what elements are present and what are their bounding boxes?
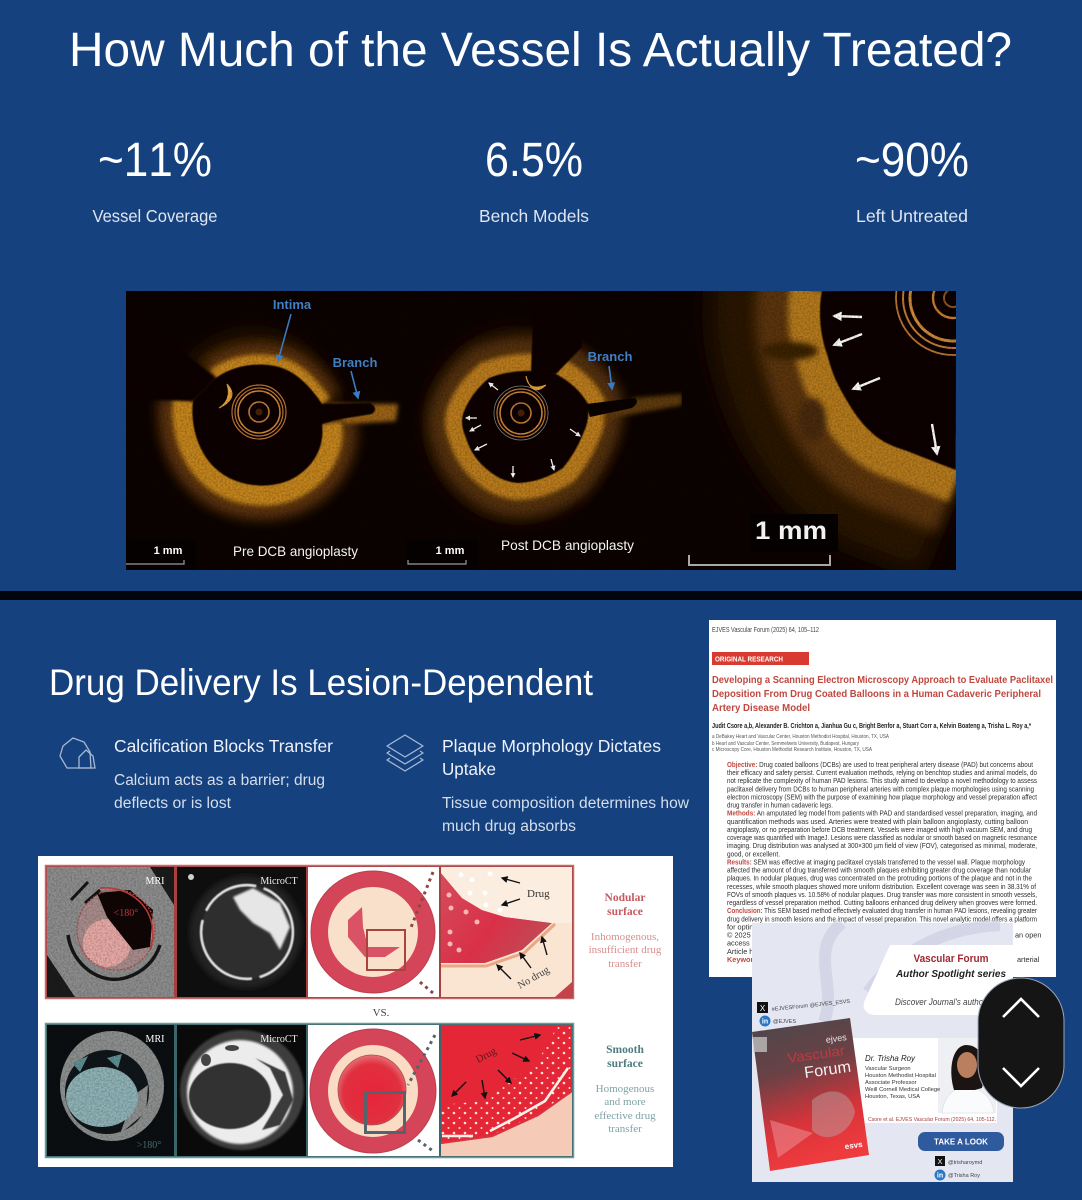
- stat: vessel coverage: Vessel Coverage: [92, 206, 218, 226]
- affiliations: c Microscopy Core, Houston Methodist Research Institute, Houston, TX, USA: [712, 747, 872, 753]
- affiliations: a DeBakey Heart and Vascular Center, Houston Methodist Hospital, Houston, TX, USA: [712, 734, 889, 740]
- doctor card: Csore et al. EJVES Vascular Forum (2025) 64, 105-112.: [868, 1117, 996, 1123]
- MicroCT nodular: MicroCT: [260, 876, 298, 887]
- abstract: Keywords: [727, 955, 762, 964]
- stat: left untreated: [855, 134, 969, 226]
- abstract: drug delivery in smooth lesions and the impact of vessel preparation. This novel analytic model offers a platform: [727, 914, 1037, 924]
- divider band: [0, 591, 1082, 600]
- abstract: for optimising: [727, 922, 770, 932]
- magnified nodular: No drug: [516, 964, 552, 992]
- stat: vessel coverage: ~11%: [98, 134, 212, 187]
- social handles bottom: X: [937, 1157, 943, 1166]
- text: nodular: Nodular: [605, 892, 645, 904]
- abstract: arterial: [1017, 955, 1040, 964]
- social handles bottom: @trisharoymd: [948, 1160, 982, 1166]
- illustration nodular: [308, 867, 439, 997]
- magnified smooth: [441, 1025, 572, 1156]
- abstract: [727, 760, 1041, 964]
- text: nodular: [589, 892, 662, 970]
- heading: drug delivery: Drug Delivery Is Lesion-Dependent: [49, 662, 594, 703]
- abstract: good, or excellent.: [727, 850, 780, 858]
- large white arrows: [834, 316, 937, 454]
- MicroCT smooth: [177, 1025, 306, 1156]
- icon: chevron down: [1003, 1068, 1039, 1086]
- abstract: not replicate the complexity of human PAD lesions. This study aimed to develop a novel methodology to assess: [727, 776, 1037, 785]
- doctor card: Houston, Texas, USA: [865, 1094, 920, 1100]
- tag: original research: [712, 652, 809, 665]
- abstract: drug transfer in human cadaveric legs.: [727, 800, 833, 810]
- abstract: Objective: Drug coated balloons (DCBs) are used to treat peripheral artery disease (PAD) but concerns about: [727, 760, 1033, 769]
- doctor card: Houston Methodist Hospital: [865, 1073, 936, 1079]
- social handles bottom: @Trisha Roy: [948, 1173, 980, 1179]
- spotlight tab: Discover Journal's authors: [895, 997, 990, 1008]
- doctor card: [853, 1038, 997, 1123]
- label: Intima: Intima: [273, 297, 312, 312]
- abstract: electron microscopy (SEM) with the purpose of examining how plaque morphology and vessel preparation affect: [727, 792, 1037, 802]
- abstract: their efficacy and safety persist. Current evaluation methods, relying on benchtop studies and animal models, do: [727, 768, 1037, 777]
- journal cover: Forum: [803, 1059, 852, 1082]
- panel: nodular vs smooth figure: [38, 856, 673, 1167]
- scale bar: pre: 1 mm: [154, 545, 183, 557]
- block: plaque morphology: Plaque Morphology Dictates: [442, 736, 661, 756]
- doctor card: Vascular Surgeon: [865, 1066, 911, 1072]
- button: take a look: [918, 1132, 1004, 1151]
- scale bar: post: 1 mm: [436, 545, 465, 557]
- social handles top: #EJVESForum @EJVES_ESVS: [772, 999, 851, 1013]
- text: smooth: transfer: [608, 1123, 642, 1135]
- scale bar: pre: [126, 546, 185, 565]
- stat: bench models: 6.5%: [485, 134, 583, 187]
- MRI nodular: MRI: [146, 876, 164, 887]
- label: Branch post: Branch: [588, 349, 632, 364]
- stat: bench models: [479, 134, 589, 226]
- stat: bench models: Bench Models: [479, 206, 589, 226]
- doctor card: Weill Cornell Medical College: [865, 1087, 940, 1093]
- illustration smooth: [308, 1025, 439, 1156]
- label: versus: VS.: [373, 1007, 390, 1019]
- icon: chevron up: [1003, 999, 1039, 1017]
- scroll control pill: [978, 978, 1064, 1108]
- stat: vessel coverage: [92, 134, 218, 226]
- spotlight tab: Author Spotlight series: [895, 968, 1006, 980]
- panel: journal article: [709, 620, 1056, 977]
- abstract: affected the amount of drug transferred with smooth plaques exhibiting greater drug coverage than nodular: [727, 866, 1031, 874]
- abstract: recesses, while smooth plaques showed more uniform distribution. Excellent coverage was seen in 38.31% of: [727, 882, 1037, 891]
- spotlight tab: [864, 945, 1013, 1015]
- label: Intima: [273, 297, 312, 361]
- abstract: regardless of vessel preparation method. Cutting balloons enhanced drug delivery when grooves were formed.: [727, 898, 1037, 907]
- text: nodular: insufficient drug: [589, 944, 662, 956]
- text: smooth: and more: [604, 1096, 646, 1108]
- panel: OCT images: [126, 291, 956, 570]
- scale bar: post: [407, 546, 467, 565]
- MRI smooth: [47, 1025, 174, 1156]
- button: take a look: TAKE A LOOK: [934, 1138, 988, 1146]
- text: nodular: surface: [607, 906, 643, 918]
- block: calcification: deflects or is lost: [114, 795, 232, 812]
- abstract: an open: [1015, 930, 1041, 940]
- journal cover: [752, 1018, 869, 1171]
- affiliations: [712, 734, 889, 753]
- text: nodular: Inhomogenous,: [591, 931, 659, 943]
- doctor card: Associate Professor: [865, 1080, 917, 1086]
- abstract: imaging. Drug distribution was analysed at 300×300 µm field of view (FOV), categorised as minimal, moderate,: [727, 841, 1037, 850]
- MicroCT smooth: MicroCT: [260, 1034, 298, 1045]
- MRI nodular: [47, 867, 174, 997]
- stats row: [92, 134, 969, 226]
- label: Branch pre: [333, 355, 377, 398]
- MicroCT nodular: [177, 867, 306, 997]
- journal citation: EJVES Vascular Forum (2025) 64, 105–112: [712, 625, 819, 634]
- abstract: angioplasty, or no preparation before DCB treatment. Vessels were imaged with high vacuum SEM, and drug: [727, 825, 1032, 834]
- label: Branch post: [588, 349, 632, 389]
- abstract: Article history: [727, 947, 771, 956]
- tag: original research: ORIGINAL RESEARCH: [715, 654, 783, 664]
- scale bar: magnified: 1 mm: [755, 517, 827, 545]
- small white arrows: [466, 383, 580, 477]
- magnified nodular: [441, 867, 572, 997]
- stat: left untreated: ~90%: [855, 134, 969, 187]
- social handles bottom: in: [937, 1172, 943, 1180]
- journal cover: esvs: [844, 1140, 864, 1151]
- label: Branch pre: Branch: [333, 355, 377, 370]
- social handles top: @EJVES: [773, 1019, 796, 1025]
- MRI smooth: MRI: [146, 1034, 164, 1045]
- abstract: © 2025 The Authors: [727, 930, 792, 940]
- journal cover: Vascular: [786, 1042, 846, 1066]
- social handles top: [757, 999, 851, 1026]
- row: smooth surface: [46, 1024, 574, 1158]
- text: smooth: Smooth: [606, 1044, 644, 1056]
- film grain: [156, 291, 956, 548]
- magnified nodular: Drug: [527, 888, 550, 900]
- text: smooth: surface: [607, 1058, 643, 1070]
- article title: Deposition From Drug Coated Balloons in a Human Cadaveric Peripheral: [712, 688, 1041, 700]
- OCT image: magnified wall: [762, 241, 1010, 472]
- text: smooth: effective drug: [594, 1110, 656, 1122]
- icon: calcification: [60, 738, 95, 768]
- block: plaque morphology: much drug absorbs: [442, 818, 576, 835]
- social handles top: in: [762, 1018, 768, 1026]
- panel: author spotlight card: [752, 923, 1013, 1182]
- block: plaque morphology: Uptake: [442, 759, 496, 779]
- stat: left untreated: Left Untreated: [856, 206, 968, 226]
- article title: Artery Disease Model: [712, 702, 810, 714]
- block: calcification: Calcium acts as a barrier; drug: [114, 772, 325, 789]
- catheter rings: [232, 385, 286, 439]
- abstract: Methods: An amputated leg model from patients with PAD and standardised vessel preparation, imaging, and: [727, 808, 1037, 818]
- abstract: paclitaxel delivery from DCBs to human peripheral arteries with complex plaque morphologies using scanning: [727, 784, 1034, 794]
- text: nodular: transfer: [608, 958, 642, 970]
- abstract: Results: SEM was effective at imaging paclitaxel crystals transferred to the vessel wall. Plaque morphology: [727, 858, 1025, 866]
- text: smooth: Homogenous: [596, 1083, 654, 1095]
- block: calcification: [60, 736, 333, 812]
- title: How Much of the Vessel Is Actually Treated?: [69, 24, 1012, 77]
- decorative wave: [824, 923, 1000, 1022]
- text: smooth: [594, 1044, 656, 1135]
- social handles bottom: [934, 1156, 982, 1180]
- MRI nodular: <180°: [114, 908, 138, 919]
- affiliations: b Heart and Vascular Center, Semmelweis University, Budapest, Hungary: [712, 741, 859, 747]
- magnified smooth: Drug: [474, 1045, 499, 1066]
- abstract: quantification methods was used. Arteries were treated with plain balloon angioplasty, cutting balloon: [727, 817, 1028, 826]
- journal cover: ejves: [825, 1032, 848, 1045]
- caption: pre DCB: Pre DCB angioplasty: [233, 543, 358, 559]
- OCT image: post DCB angioplasty: [430, 291, 682, 517]
- article title: [712, 674, 1053, 714]
- abstract: FOVs of smooth plaques vs. 10.58% of nodular plaques. Drug transfer was more consistent in smooth vessels,: [727, 890, 1037, 899]
- abstract: Conclusion: This SEM based method effectively evaluated drug transfer in human PAD lesions, revealing greater: [727, 906, 1037, 915]
- row: nodular surface: [46, 866, 574, 998]
- scale bar: magnified: [689, 514, 838, 565]
- block: plaque morphology: Tissue composition determines how: [442, 795, 690, 812]
- block: plaque morphology: [387, 735, 690, 835]
- social handles top: X: [760, 1004, 766, 1013]
- icon: layers: [387, 735, 423, 771]
- doctor card: Dr. Trisha Roy: [865, 1053, 916, 1063]
- OCT image: pre DCB angioplasty: [126, 300, 398, 504]
- caption: post DCB: Post DCB angioplasty: [501, 537, 634, 553]
- spotlight tab: Vascular Forum: [914, 953, 989, 965]
- MRI smooth: >180°: [137, 1140, 161, 1151]
- block: calcification: Calcification Blocks Transfer: [114, 736, 333, 756]
- abstract: access article: [727, 938, 771, 948]
- abstract: plaques. In nodular plaques, drug was concentrated on the protruding portions of the plaque and not in the: [727, 874, 1032, 882]
- doctor photo: [938, 1038, 996, 1113]
